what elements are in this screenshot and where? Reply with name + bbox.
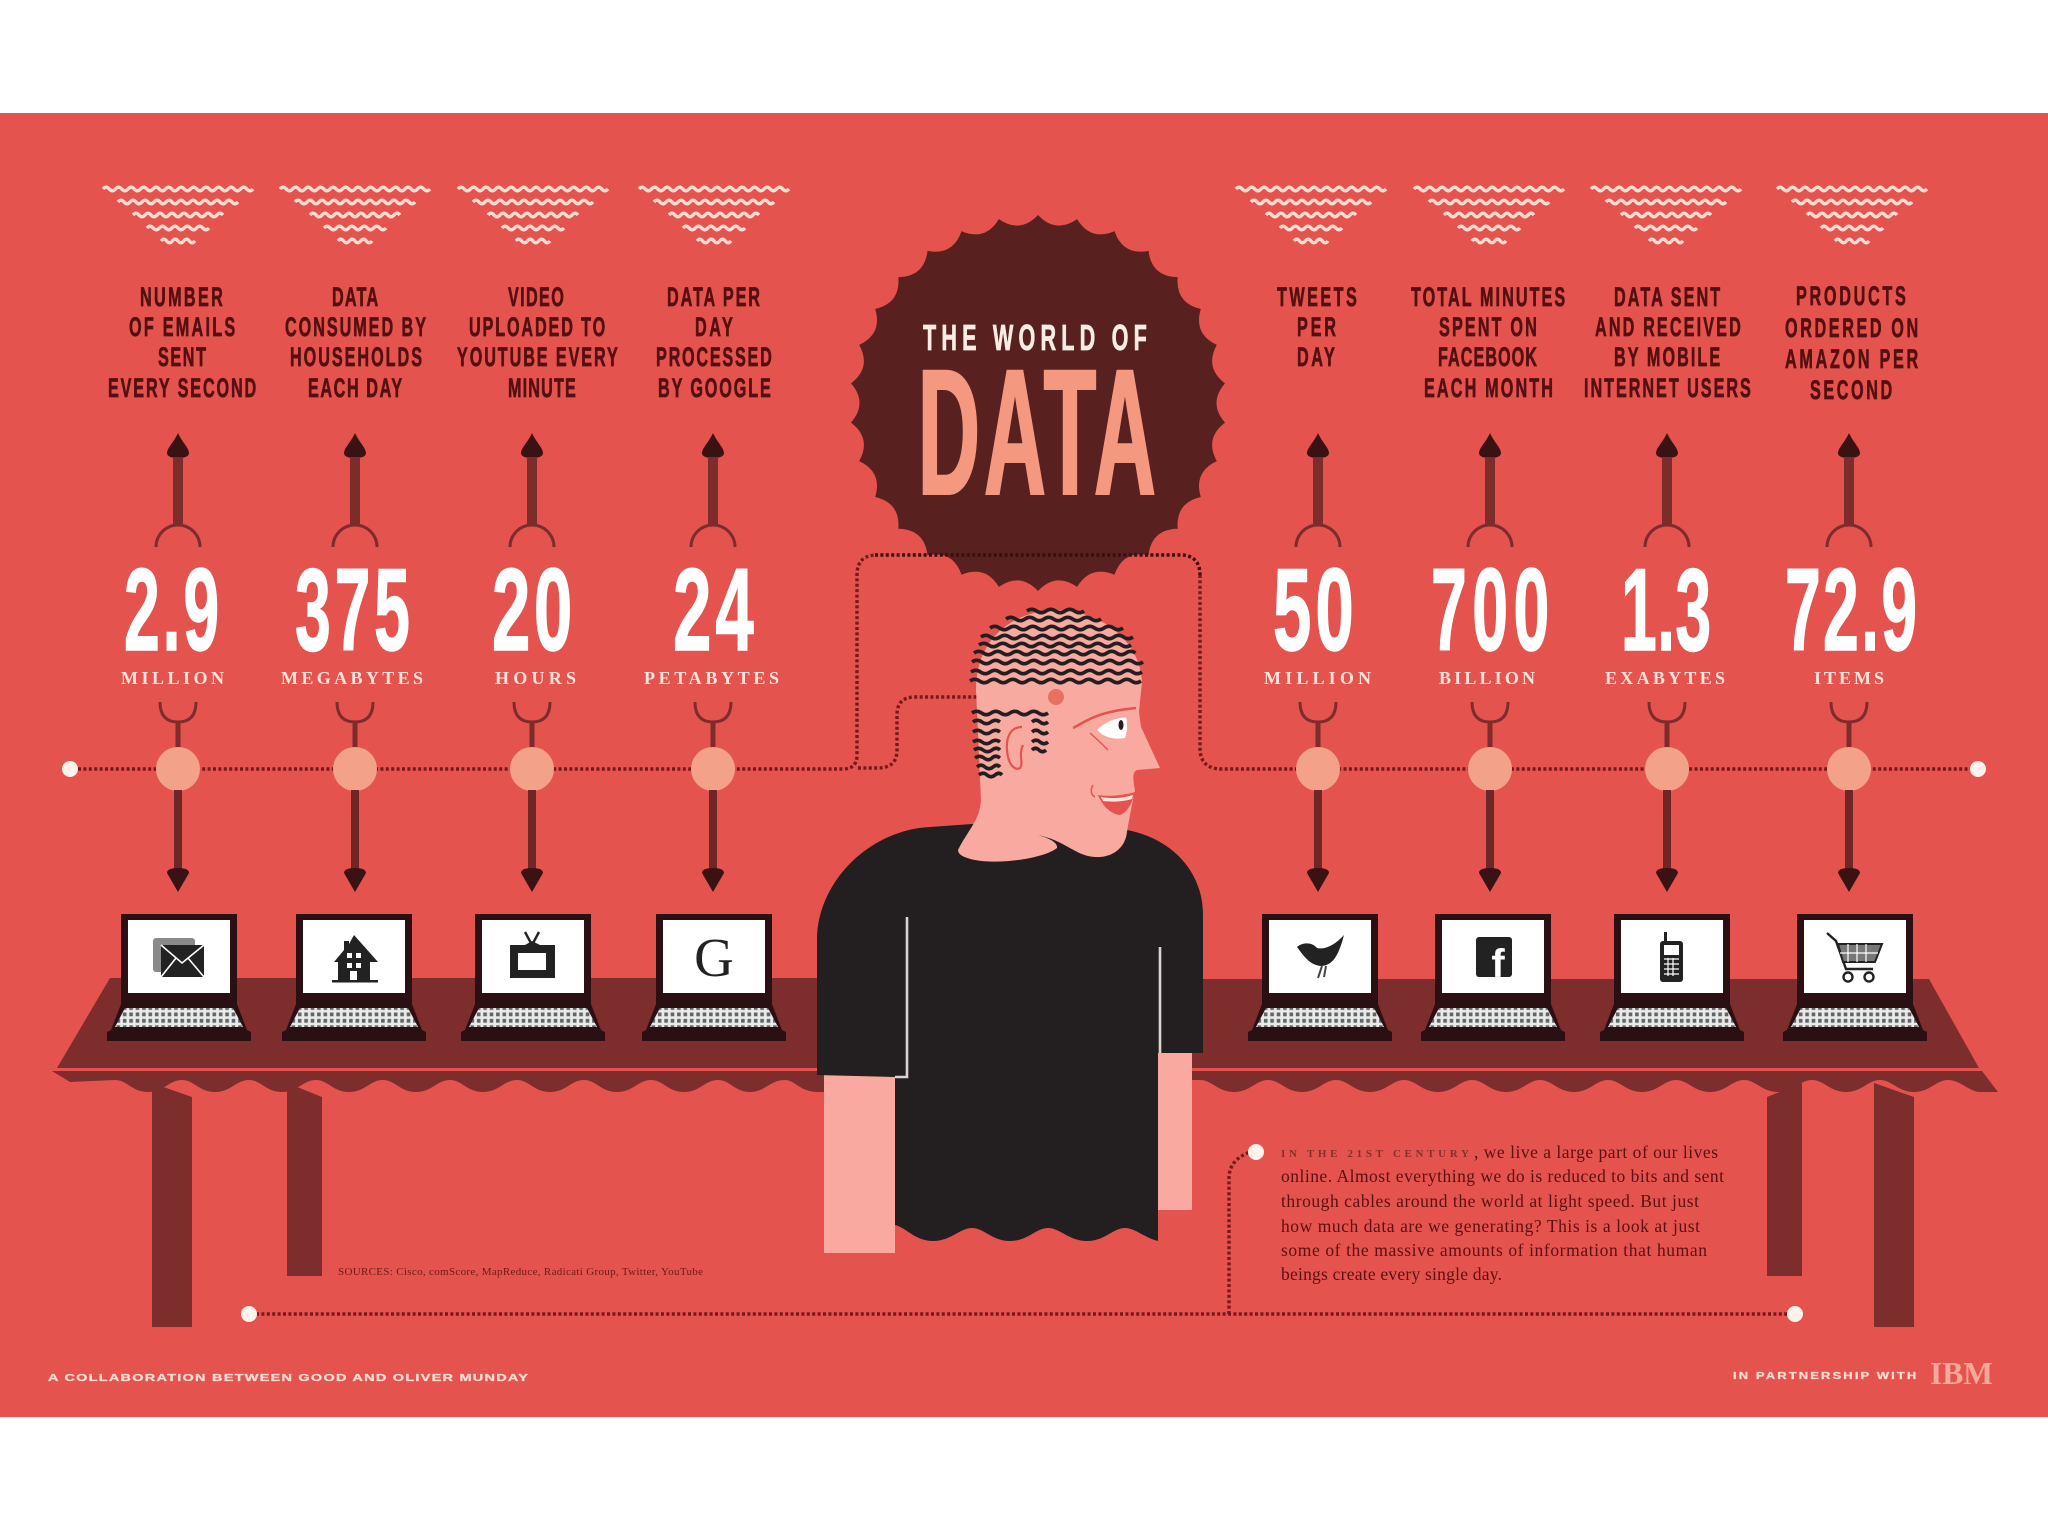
label: TOTAL MINUTES (1411, 282, 1565, 312)
stat column: mobile (1584, 187, 1751, 1041)
laptop (282, 914, 426, 1041)
laptop (1421, 914, 1565, 1041)
label: PRODUCTS (1796, 281, 1906, 311)
number: 1.3 (1621, 546, 1711, 676)
man figure (817, 609, 1203, 1253)
number: 700 (1431, 546, 1549, 676)
number: 24 (673, 545, 754, 676)
sideburn hair waves (972, 711, 1048, 777)
wave signal (458, 187, 608, 243)
intro text block (1281, 1142, 1724, 1284)
label (1785, 281, 1918, 405)
unit: MILLION (121, 668, 224, 688)
label: NUMBER (140, 282, 223, 312)
unit: BILLION (1439, 668, 1535, 688)
title line 2: DATA (918, 331, 1156, 535)
label: SENT (158, 342, 206, 372)
arrows and node (333, 433, 377, 892)
wave signal (280, 187, 430, 243)
eye (1073, 708, 1136, 750)
network end dots (62, 761, 1986, 1322)
label: DAY (695, 312, 733, 342)
label: EVERY SECOND (108, 373, 256, 403)
icon: house (332, 935, 378, 982)
arrows and node (1296, 433, 1340, 892)
laptop (107, 914, 251, 1041)
number: 2.9 (124, 546, 219, 676)
label: PER (1297, 312, 1336, 342)
unit: PETABYTES (644, 668, 779, 688)
label: FACEBOOK (1438, 342, 1537, 372)
stat column: facebook (1411, 187, 1565, 1041)
label: PROCESSED (656, 342, 772, 372)
stat column: emails (103, 187, 256, 1041)
top hair waves (970, 609, 1143, 683)
dotted connector across badge (875, 555, 1200, 575)
label: DAY (1297, 342, 1335, 372)
label: HOUSEHOLDS (290, 342, 422, 372)
label (1584, 282, 1751, 403)
label: YOUTUBE EVERY (457, 342, 618, 372)
arrows and node (691, 433, 735, 892)
arrows and node (1645, 433, 1689, 892)
label: DATA SENT (1614, 282, 1720, 312)
sources: SOURCES: Cisco, comScore, MapReduce, Radicati Group, Twitter, YouTube (338, 1266, 703, 1278)
unit: MILLION (1264, 668, 1371, 688)
label: BY MOBILE (1614, 342, 1720, 372)
scalloped seal (851, 215, 1225, 591)
table with laptops surface (52, 978, 1998, 1327)
stat column: amazon (1777, 187, 1927, 1041)
ear (1007, 727, 1023, 769)
title line 1: THE WORLD OF (923, 318, 1147, 358)
title badge (851, 215, 1225, 591)
label (108, 282, 256, 403)
laptop (1600, 914, 1744, 1041)
stat column: households (280, 187, 430, 1041)
wave signal (1777, 187, 1927, 243)
icon: google G: G (694, 927, 734, 988)
right arm (1158, 1050, 1192, 1210)
footer credit right: IN PARTNERSHIP WITH (1733, 1371, 1916, 1382)
label (285, 282, 426, 403)
black shirt (817, 822, 1203, 1241)
icon: envelope (153, 938, 204, 977)
label: AMAZON PER (1785, 344, 1918, 374)
IBM logo: IBM (1930, 1355, 1993, 1391)
icon: bird (1297, 935, 1344, 978)
intro text block: online. Almost everything we do is reduced to bits and sent (1281, 1166, 1724, 1186)
head (958, 610, 1160, 862)
arrows and node (510, 433, 554, 892)
label: DATA (332, 282, 378, 312)
sleeve lines (895, 917, 1160, 1077)
left arm (824, 1075, 895, 1253)
label: VIDEO (508, 282, 564, 312)
laptop (642, 914, 786, 1041)
brain node (1048, 689, 1064, 705)
label (1277, 282, 1357, 372)
label: TWEETS (1277, 282, 1357, 312)
arrows and node (1468, 433, 1512, 892)
arrows and node (1827, 433, 1871, 892)
laptop (1248, 914, 1392, 1041)
icon: television (510, 932, 555, 978)
icon: shopping cart (1827, 933, 1882, 982)
intro text block: beings create every single day. (1281, 1264, 1502, 1284)
label: MINUTE (508, 373, 576, 403)
label: DATA PER (667, 282, 760, 312)
label: SPENT ON (1439, 312, 1537, 342)
unit: ITEMS (1814, 668, 1884, 688)
number: 72.9 (1785, 546, 1917, 676)
label: BY GOOGLE (658, 373, 771, 403)
label: EACH DAY (308, 373, 402, 403)
label: UPLOADED TO (469, 312, 605, 342)
wave signal (1236, 187, 1386, 243)
wave signal (103, 187, 253, 243)
label: INTERNET USERS (1584, 373, 1751, 403)
wave signal (639, 187, 789, 243)
icon: facebook (1476, 937, 1512, 986)
number: 20 (492, 545, 572, 676)
stat column: tweets (1236, 187, 1392, 1041)
label: SECOND (1810, 375, 1892, 405)
unit: MEGABYTES (281, 668, 423, 688)
label: OF EMAILS (129, 312, 235, 342)
number: 50 (1273, 545, 1354, 676)
laptop (461, 914, 605, 1041)
intro text block: through cables around the world at light speed. But just (1281, 1191, 1699, 1211)
icon: facebook: f (1491, 942, 1505, 986)
stat column: youtube (457, 187, 618, 1041)
label: ORDERED ON (1785, 313, 1918, 343)
footer credit left: A COLLABORATION BETWEEN GOOD AND OLIVER MUNDAY (48, 1372, 529, 1383)
unit: HOURS (495, 668, 576, 688)
label: CONSUMED BY (285, 312, 426, 342)
intro text block: , we live a large part of our lives (1474, 1142, 1718, 1162)
label (457, 282, 618, 403)
intro text block: how much data are we generating? This is a look at just (1281, 1216, 1700, 1236)
wave signal (1414, 187, 1564, 243)
label: EACH MONTH (1424, 373, 1553, 403)
unit: EXABYTES (1605, 668, 1725, 688)
wave signal (1591, 187, 1741, 243)
label: AND RECEIVED (1595, 312, 1741, 342)
stat column: google (639, 187, 789, 1041)
laptop (1783, 914, 1927, 1041)
intro text block: some of the massive amounts of information that human (1281, 1240, 1707, 1260)
icon: mobile phone (1660, 932, 1683, 982)
number: 375 (295, 546, 410, 676)
intro text block: IN THE 21ST CENTURY (1281, 1148, 1469, 1160)
mouth (1091, 785, 1135, 815)
label (1411, 282, 1565, 403)
label (656, 282, 772, 403)
dotted network lines (78, 555, 1970, 1314)
arrows and node (156, 433, 200, 892)
